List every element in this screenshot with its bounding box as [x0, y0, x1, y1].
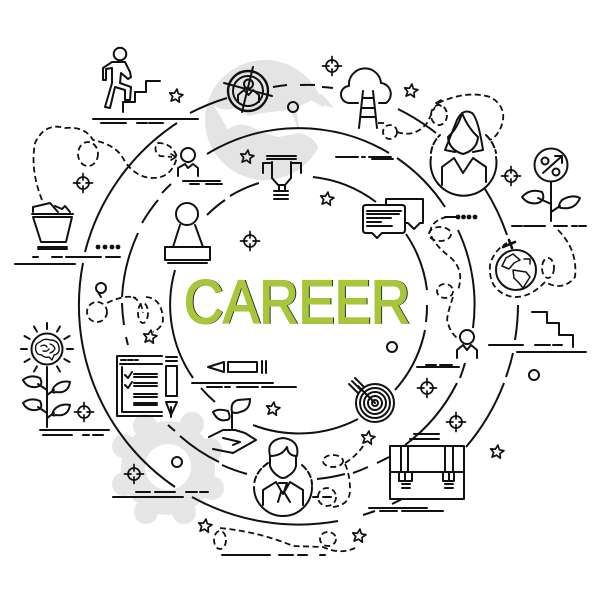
dashed route: man loop to star — [313, 443, 365, 507]
icon: pen and baseline — [192, 361, 296, 387]
dashed route: cloud to woman — [378, 107, 435, 139]
icon: earth with plane — [496, 240, 536, 290]
middle ring — [122, 128, 475, 479]
dashed route: plant to globe — [490, 230, 575, 297]
icon: small person right — [417, 330, 477, 367]
icon: man climbing stairs — [93, 48, 198, 123]
title: CAREER: CAREER — [184, 268, 410, 336]
dashed route: bucket to person — [34, 127, 177, 200]
icon: dartboard — [349, 378, 394, 422]
icon: checklist with pencil — [117, 356, 177, 417]
icon: man portrait — [254, 438, 312, 516]
inner ring — [170, 177, 427, 433]
title: CAREER: CAREER — [185, 268, 411, 336]
four dots left — [96, 245, 120, 249]
icon: trophy — [263, 156, 301, 199]
stars — [143, 83, 505, 543]
icon: stairs right — [489, 312, 586, 352]
icon: speech bubbles — [363, 199, 423, 238]
crosshairs — [74, 56, 520, 484]
outer ring — [79, 85, 518, 525]
icon: bucket — [15, 203, 120, 264]
dots and dashed route on right — [429, 215, 477, 338]
icon: brain flower — [21, 323, 109, 435]
icon: sprout in hand — [209, 399, 256, 453]
background gear — [112, 412, 224, 524]
icon: cloud with ladder — [341, 68, 391, 128]
icon: percent plant — [512, 148, 586, 226]
icon: woman portrait — [431, 112, 496, 196]
dashed route: woman loop — [431, 95, 503, 140]
dashed route: pin loops left — [87, 283, 163, 332]
icon: stamp — [165, 203, 210, 263]
icon: target with person — [224, 67, 272, 112]
icon: briefcase — [369, 434, 464, 511]
gear baseline — [113, 492, 208, 497]
small circles — [172, 102, 539, 467]
icon: small person left — [178, 148, 222, 184]
background globe — [205, 60, 336, 190]
lines above speech bubble — [336, 157, 393, 159]
dashed route: bottom — [214, 528, 355, 555]
